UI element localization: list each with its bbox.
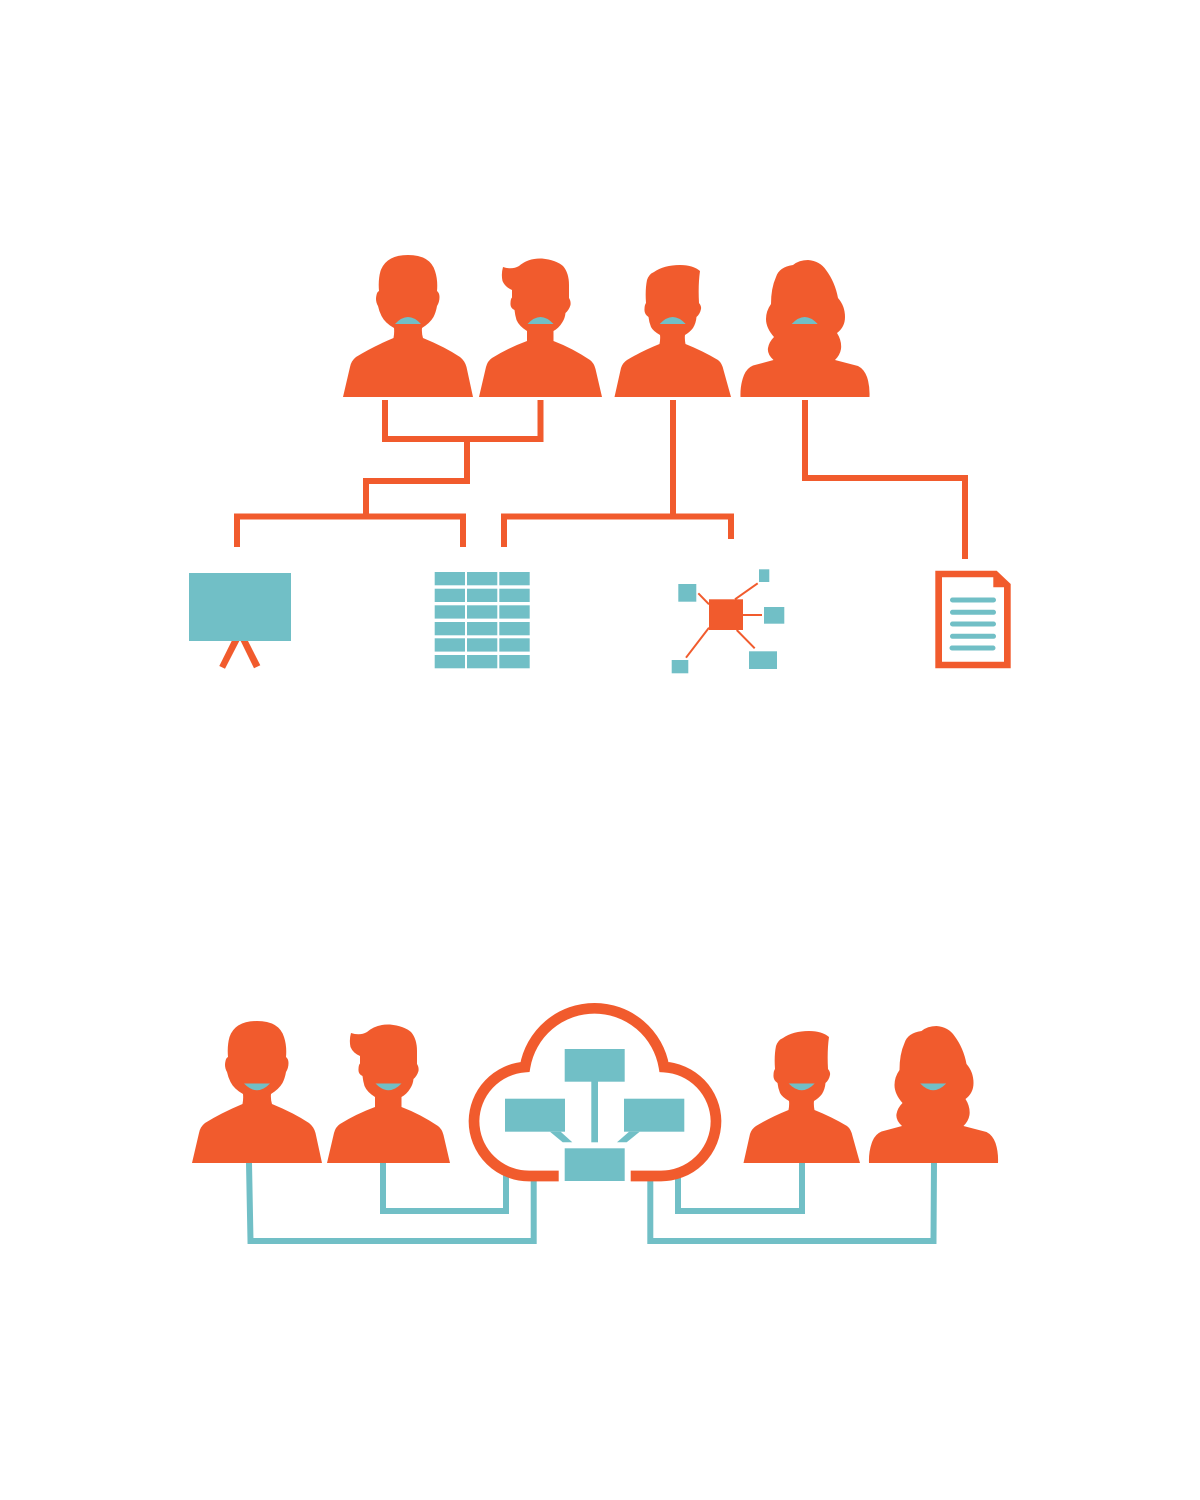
connector: man to table and network	[504, 400, 731, 547]
connectors: people to cloud	[249, 1163, 934, 1241]
person 3: man with flat-top hair	[744, 1031, 860, 1163]
bottom panel: team sharing through the cloud	[192, 1008, 998, 1241]
person 4: woman with wavy hair	[869, 1026, 998, 1163]
person 1: bald man	[343, 255, 473, 397]
top panel: team and deliverables	[189, 255, 1011, 673]
cloud with linked boxes	[474, 1008, 716, 1181]
icon: document	[935, 571, 1011, 668]
person 2: man with swept hair	[479, 258, 602, 397]
icon: table grid	[435, 572, 530, 668]
person 1: bald man	[192, 1021, 322, 1163]
person 2: man with swept hair	[327, 1024, 450, 1163]
connector: woman to document	[805, 400, 965, 559]
icon: presentation board	[189, 573, 291, 669]
person 3: man with flat-top hair	[614, 265, 731, 397]
connector: two men to presentation and table	[237, 400, 540, 547]
person 4: woman with wavy hair	[740, 260, 870, 397]
icon: network diagram	[672, 569, 784, 673]
